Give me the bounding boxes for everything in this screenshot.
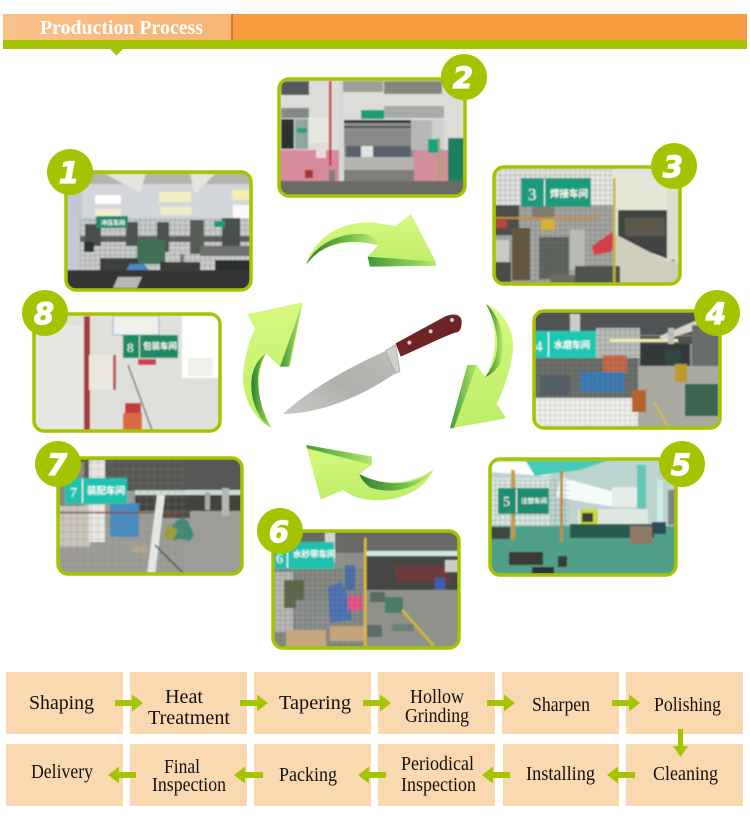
step labels: Polishing — [654, 694, 721, 716]
step boxes — [6, 672, 743, 806]
icon: number badge 5: 5 — [671, 448, 691, 482]
step labels: Treatment — [148, 707, 230, 729]
step labels: Inspection — [401, 774, 476, 796]
panel: step 4 grinding workshop photo: 水磨车间 — [554, 339, 590, 350]
panel: step 8 packing workshop photo — [34, 314, 220, 432]
arrow: left curved arrow — [243, 302, 303, 428]
panel: step 7 assembly workshop photo: 装配车间 — [87, 485, 125, 497]
panel: step 3 welding workshop photo — [494, 167, 680, 286]
icon: number badge 2 — [441, 54, 487, 100]
icon: number badge 1 — [47, 149, 93, 195]
step labels: Hollow — [410, 686, 465, 708]
panel: step 5 injection workshop photo: 注塑车间 — [521, 496, 548, 505]
step labels: Grinding — [405, 705, 469, 727]
arrow: bottom curved arrow — [306, 445, 433, 500]
panel: process flow steps — [6, 672, 743, 806]
icon: number badge 7 — [35, 441, 81, 487]
step labels: Sharpen — [532, 694, 590, 716]
icon: number badge 8 — [22, 290, 68, 336]
step labels: Installing — [526, 763, 595, 785]
icon: number badge 6: 6 — [269, 515, 289, 549]
panel: step 6 sand belt workshop photo — [273, 531, 459, 649]
step labels: Final — [164, 756, 200, 778]
panel: step 5 injection workshop photo: 5 — [503, 495, 510, 510]
panel: step 4 grinding workshop photo — [534, 311, 720, 429]
panel: step 4 grinding workshop photo: 4 — [535, 339, 543, 355]
step labels: Packing — [279, 764, 337, 786]
icon: number badge 7: 7 — [47, 448, 68, 482]
panel: step 7 assembly workshop photo — [58, 458, 242, 575]
step labels: Tapering — [279, 692, 351, 714]
step labels: Heat — [165, 686, 203, 708]
icon: number badge 5 — [659, 441, 705, 487]
panel: step 3 welding workshop photo: 焊接车间 — [550, 188, 588, 200]
step labels — [29, 686, 721, 796]
panel: step 2 workshop photo — [279, 79, 465, 198]
panel: step 3 welding workshop photo: 3 — [528, 185, 536, 204]
step labels: Cleaning — [653, 763, 718, 785]
icon: number badge 6 — [257, 508, 303, 554]
icon: number badge 1: 1 — [59, 156, 79, 190]
icon: kitchen knife — [283, 314, 462, 414]
icon: number badge 4: 4 — [705, 297, 726, 331]
icon: number badge 8: 8 — [34, 297, 54, 331]
step labels: Inspection — [152, 774, 226, 796]
panel: step 1 workshop photo: 冲压车间 — [101, 219, 125, 227]
flow arrows — [108, 694, 688, 784]
panel: step 7 assembly workshop photo: 7 — [70, 486, 77, 501]
panel: step 8 packing workshop photo: 包装车间 — [143, 341, 177, 351]
step labels: Delivery — [31, 761, 93, 783]
panel: step 6 sand belt workshop photo: 6 — [276, 552, 283, 567]
step labels: Periodical — [401, 753, 474, 775]
section header bar — [3, 14, 747, 56]
panel: step 8 packing workshop photo: 8 — [127, 340, 134, 355]
icon: number badge 3 — [651, 143, 697, 189]
title: Production Process — [40, 17, 203, 39]
panel: step 1 workshop photo — [66, 172, 251, 290]
step labels: Shaping — [29, 692, 94, 714]
panel: step 5 injection workshop photo — [490, 459, 676, 575]
arrow: top curved arrow — [306, 214, 436, 267]
panel: step 6 sand belt workshop photo: 水砂带车间 — [293, 549, 336, 559]
icon: number badge 2: 2 — [453, 61, 473, 95]
icon: number badge 3: 3 — [663, 150, 683, 184]
icon: number badge 4 — [694, 290, 740, 336]
arrow: right curved arrow — [450, 304, 513, 428]
